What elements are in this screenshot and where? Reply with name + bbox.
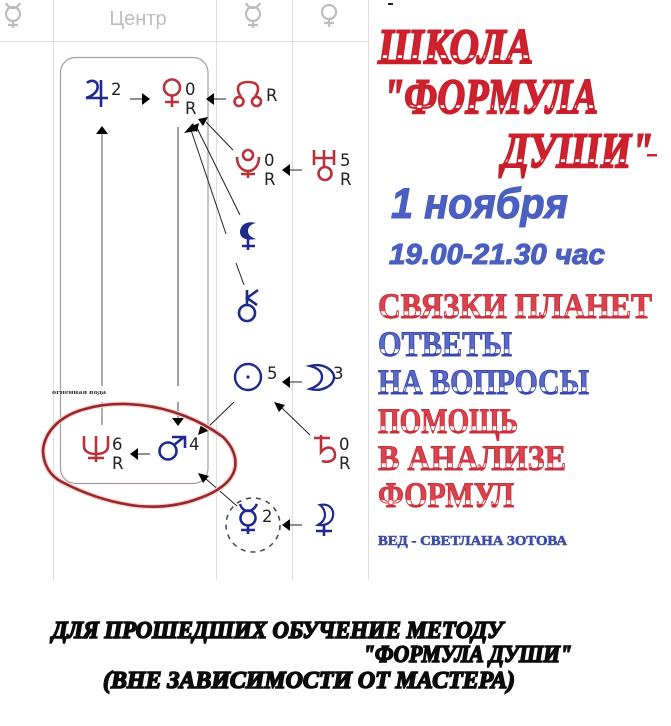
icon: jupiter — [86, 80, 122, 107]
callout: red hand-drawn ellipse — [43, 404, 235, 507]
footer note: "ФОРМУЛА ДУШИ" — [363, 642, 572, 668]
icon: moon: 3 — [333, 364, 344, 383]
title: "ФОРМУЛА — [383, 68, 598, 124]
icon: sun: 5 — [267, 364, 278, 383]
text block: topics: НА ВОПРОСЫ — [378, 362, 589, 402]
title: ШКОЛА — [377, 18, 533, 74]
icon: mercury — [240, 504, 272, 534]
decorative-size dash top — [388, 3, 393, 5]
arrow: venus down to mars — [172, 127, 184, 426]
icon: saturn: 0 — [339, 435, 350, 454]
icon: saturn: R — [339, 454, 350, 473]
text block: topics: В АНАЛИЗЕ — [378, 438, 566, 478]
icon: venus: R — [185, 99, 196, 118]
date: 1 ноября — [391, 180, 568, 228]
text block: topics: ПОМОЩЬ — [378, 401, 518, 441]
icon: uranus: 5 — [340, 151, 350, 170]
panel: chart table grid — [0, 0, 368, 580]
icon: proserpina — [316, 505, 333, 536]
label: fiery water: огненная вода — [52, 389, 107, 396]
icon: neptune — [84, 435, 123, 473]
icon: north node: R — [266, 86, 277, 105]
footer note — [50, 618, 572, 694]
arrows between planets — [130, 93, 310, 531]
icon: pluto: R — [264, 170, 275, 189]
title — [377, 18, 657, 178]
icon: header venus — [322, 5, 336, 27]
time: 19.00-21.30 час — [389, 239, 605, 271]
icon: saturn — [314, 435, 350, 473]
footer note: ДЛЯ ПРОШЕДШИХ ОБУЧЕНИЕ МЕТОДУ — [50, 618, 505, 644]
text block: topics: ФОРМУЛ — [378, 475, 514, 515]
icon: uranus: R — [340, 170, 351, 189]
panel: center rounded box — [60, 58, 208, 484]
icon: mars — [160, 435, 200, 460]
icon: neptune: 6 — [112, 435, 122, 454]
icon: jupiter: 2 — [111, 80, 122, 99]
icon: header mercury right — [246, 3, 260, 28]
icon: mars: 4 — [189, 435, 200, 454]
footer note: (ВНЕ ЗАВИСИМОСТИ ОТ МАСТЕРА) — [103, 668, 515, 694]
icon: lilith — [240, 222, 256, 250]
icon: venus: 0 — [185, 80, 196, 99]
icon: chiron — [239, 290, 258, 321]
arrow: neptune up to jupiter — [96, 126, 108, 425]
icon: dashed circle around mercury — [226, 498, 280, 552]
text block: topics — [378, 286, 652, 515]
icon: north node — [234, 82, 277, 106]
icon: pluto: 0 — [264, 151, 274, 170]
icon: moon — [310, 364, 344, 390]
icon: pluto — [237, 150, 275, 189]
presenter: ВЕД - СВЕТЛАНА ЗОТОВА — [378, 534, 568, 549]
icon: neptune: R — [112, 454, 123, 473]
icon: sun — [235, 364, 278, 390]
header: column labels — [6, 3, 336, 30]
icon: mercury: 2 — [262, 507, 272, 526]
icon: header mercury left — [6, 3, 20, 28]
text block: topics: ОТВЕТЫ — [378, 324, 512, 364]
icon: uranus — [314, 150, 351, 189]
icon: venus — [164, 80, 196, 118]
heading: center column: Центр — [109, 8, 167, 30]
